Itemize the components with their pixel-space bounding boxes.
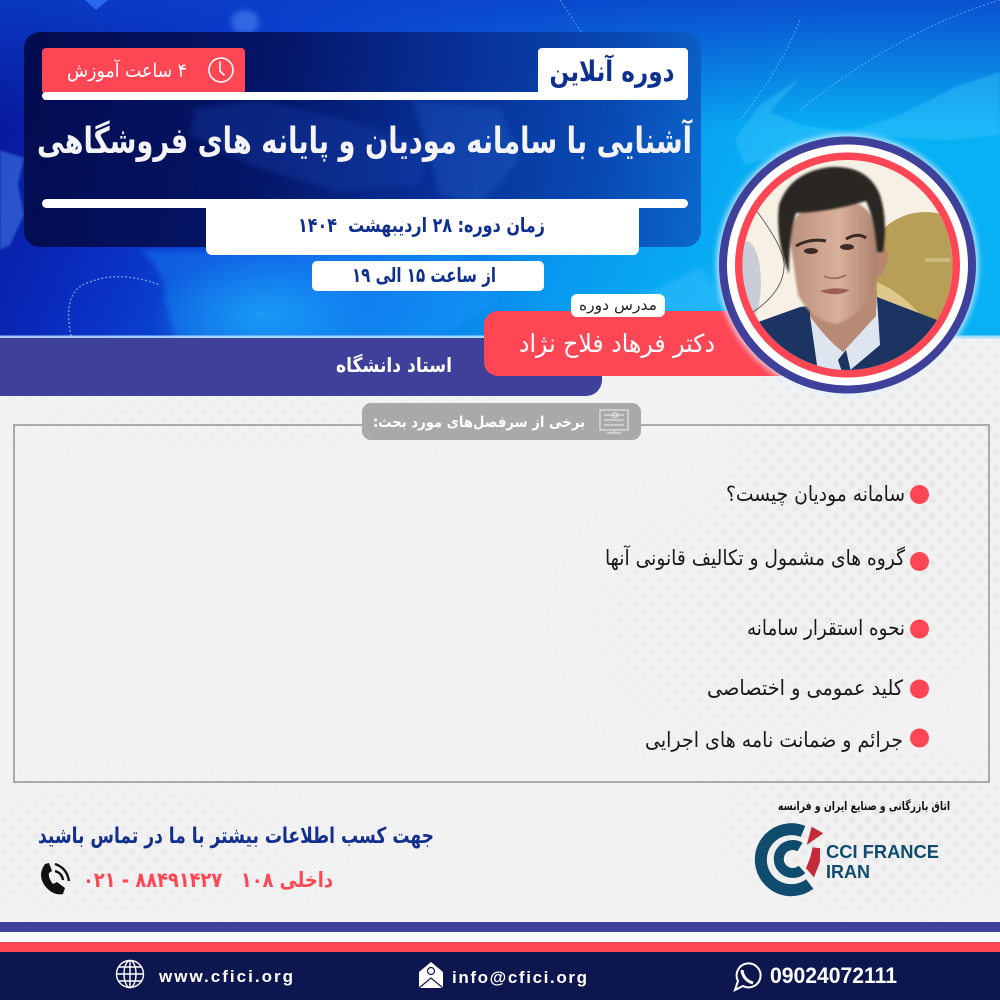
date box bbox=[42, 199, 688, 255]
topic 1: سامانه مودیان چیست؟ bbox=[726, 482, 905, 506]
icon: globe bbox=[116, 960, 144, 988]
duration tag bbox=[42, 48, 245, 94]
portrait photo bbox=[742, 160, 952, 370]
logo: CCI France Iran bbox=[761, 827, 939, 890]
halftone dot texture bbox=[778, 382, 986, 871]
instructor label: مدرس دوره bbox=[579, 296, 657, 314]
logo: CCI France Iran: CCI FRANCE bbox=[826, 842, 939, 862]
phone number: داخلی ۱۰۸ ۸۸۴۹۱۴۲۷ - ۰۲۱ bbox=[83, 868, 333, 892]
contact call to action: جهت کسب اطلاعات بیشتر با ما در تماس باشید bbox=[38, 824, 434, 849]
dark title panel bbox=[24, 32, 701, 247]
title: آشنایی با سامانه مودیان و پایانه های فروشگاهی bbox=[37, 118, 693, 162]
topic 3: نحوه استقرار سامانه bbox=[747, 616, 905, 640]
duration text: ۴ ساعت آموزش bbox=[67, 58, 187, 82]
tricolor stripes bbox=[0, 922, 1000, 952]
topic 4: کلید عمومی و اختصاصی bbox=[707, 676, 903, 700]
instructor label bbox=[571, 294, 665, 317]
topic 5: جرائم و ضمانت نامه های اجرایی bbox=[645, 728, 903, 753]
online course tag: دوره آنلاین bbox=[550, 54, 674, 88]
topics heading pill bbox=[362, 403, 641, 440]
time box: از ساعت ۱۵ الی ۱۹ bbox=[352, 263, 496, 287]
topic 2: گروه های مشمول و تکالیف قانونی آنها bbox=[605, 545, 905, 570]
icon: email bbox=[419, 962, 443, 988]
time box bbox=[312, 261, 544, 291]
footer bar bbox=[0, 952, 1000, 1000]
whatsapp number: 09024072111 bbox=[770, 963, 897, 988]
portrait medallion bbox=[716, 134, 985, 396]
icon: clock bbox=[209, 58, 233, 82]
icon: whatsapp bbox=[735, 963, 761, 990]
topics box bbox=[14, 425, 989, 782]
icon: phone bbox=[41, 863, 69, 894]
university title band bbox=[0, 338, 602, 396]
email address: info@cfici.org bbox=[452, 968, 587, 987]
date box: زمان دوره: ۲۸ اردیبهشت ۱۴۰۴ bbox=[298, 213, 545, 237]
blue world map header background bbox=[0, 0, 1000, 375]
instructor name banner: دکتر فرهاد فلاح نژاد bbox=[519, 329, 715, 358]
university title band: استاد دانشگاه bbox=[336, 353, 452, 377]
topics heading pill: برخی از سرفصل‌های مورد بحث: bbox=[373, 413, 585, 431]
instructor name banner bbox=[484, 311, 800, 376]
icon: presentation monitor bbox=[600, 410, 628, 433]
white rule above title bbox=[42, 92, 688, 100]
website: www.cfici.org bbox=[158, 967, 293, 986]
logo: CCI France Iran: IRAN bbox=[826, 862, 870, 882]
chamber of commerce name: اتاق بازرگانی و صنایع ایران و فرانسه bbox=[778, 799, 950, 814]
online course tag bbox=[538, 48, 688, 100]
